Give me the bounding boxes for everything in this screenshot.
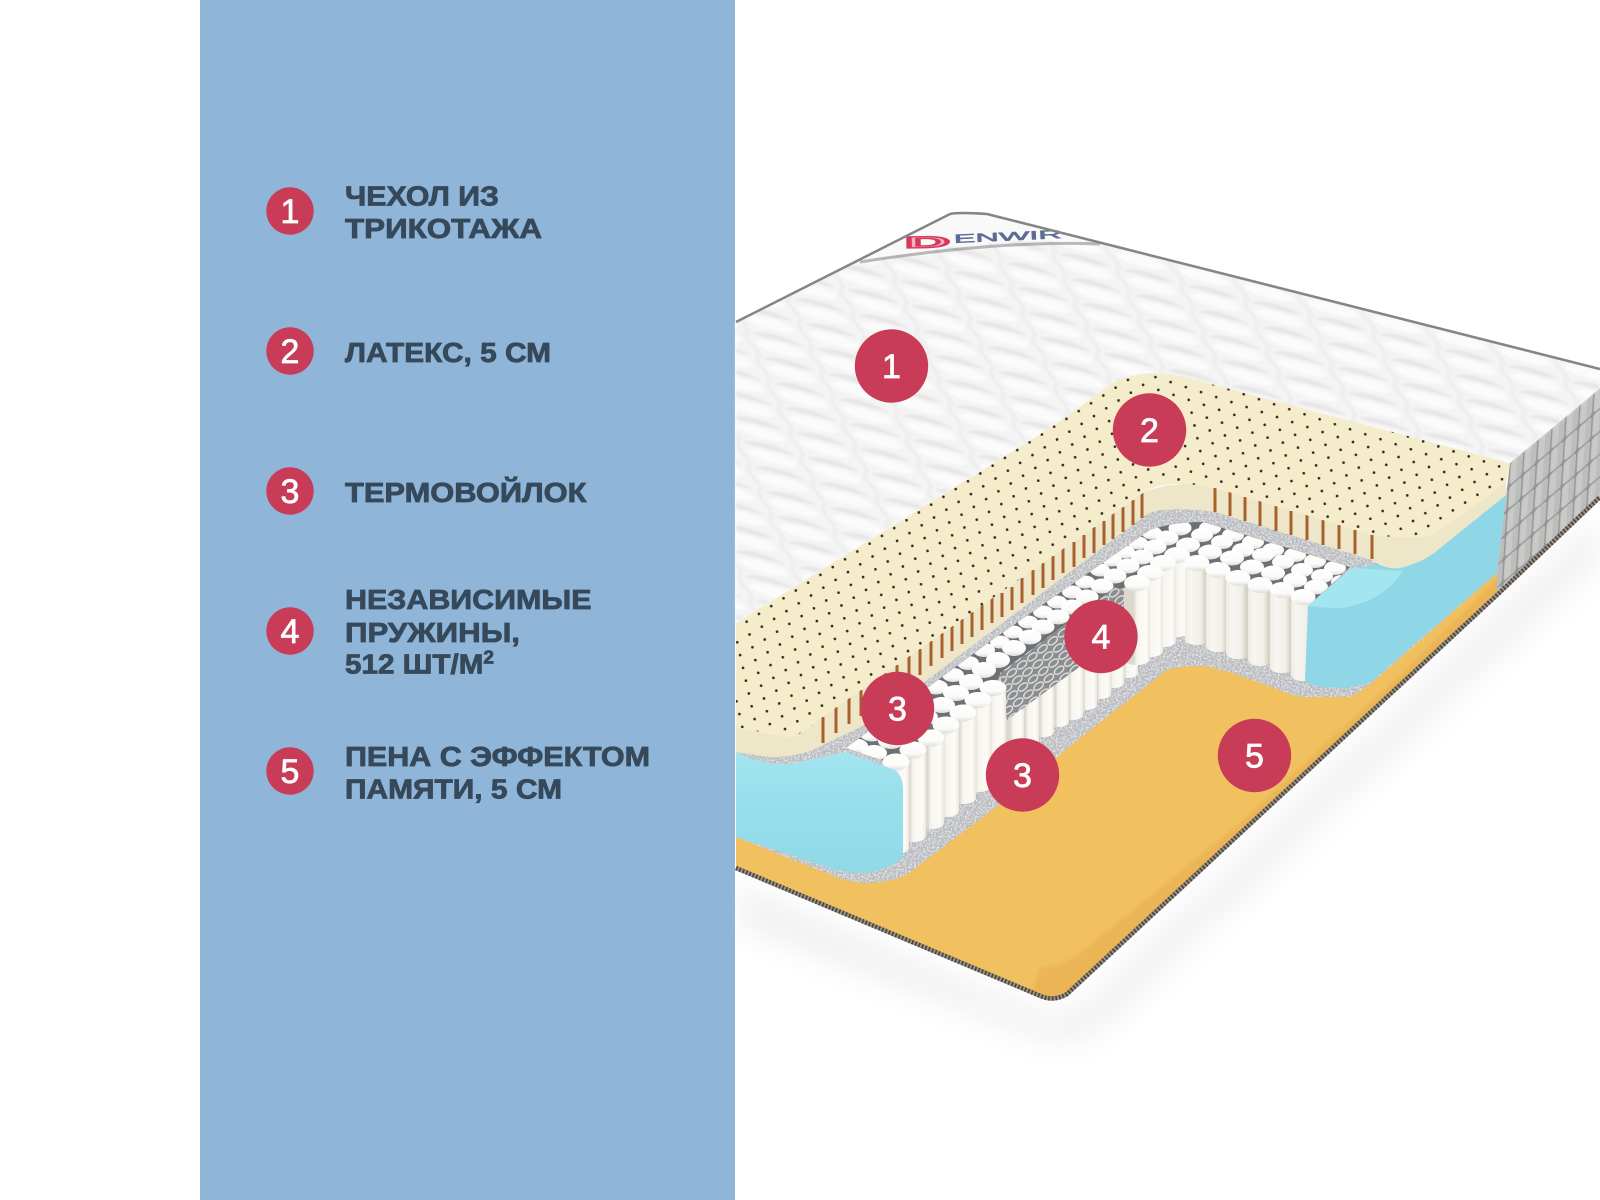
marker 4: 4 [1092, 618, 1110, 656]
layer 4: pocket spring tops [846, 522, 1350, 760]
mattress cutaway illustration [720, 213, 1600, 1041]
layer 3: foam edge, right [1305, 495, 1506, 688]
front spring pockets, left run [882, 680, 1006, 854]
short spring pockets [1002, 600, 1138, 754]
layer 4: pocket springs [882, 547, 1316, 854]
legend item 4: ПРУЖИНЫ, [345, 617, 520, 648]
marker 3 lower: 3 [1013, 757, 1032, 795]
legend item 5: ПАМЯТИ, 5 СМ [345, 774, 562, 804]
marker 2 [1113, 393, 1186, 467]
marker 1: 1 [882, 348, 901, 386]
layer 2: latex top face with perforation [736, 373, 1510, 737]
front spring pockets, right run [1184, 555, 1316, 681]
side wall quilted panel [1497, 388, 1600, 592]
cover edge piping [736, 213, 1600, 369]
legend item 4: НЕЗАВИСИМЫЕ [345, 584, 592, 615]
marker 3 upper: 3 [888, 690, 907, 728]
layer 3: foam edge, left [736, 752, 903, 873]
marker 5 [1218, 719, 1291, 792]
legend list [266, 180, 650, 804]
layer 1: knitted cover [736, 213, 1600, 623]
panel: legend background [200, 0, 735, 1200]
marker 4 [1064, 600, 1138, 673]
cover label with brand logo [860, 213, 1100, 262]
tall spring pockets at corner [1124, 547, 1190, 665]
legend item 2: 2 [281, 333, 299, 371]
legend item 3 [266, 467, 587, 515]
legend item 5: ПЕНА С ЭФФЕКТОМ [345, 741, 650, 772]
exposed steel coils [1000, 587, 1135, 720]
marker 5: 5 [1245, 738, 1264, 776]
legend item 1: ТРИКОТАЖА [345, 213, 542, 244]
marker 1 [855, 329, 928, 403]
legend item 1: 1 [281, 193, 299, 231]
legend item 5: 5 [281, 753, 299, 791]
floor shadow [736, 515, 1600, 1041]
cover label with brand logo: ENWIR [954, 227, 1063, 246]
legend item 3: ТЕРМОВОЙЛОК [345, 476, 587, 508]
legend item 2: ЛАТЕКС, 5 СМ [345, 337, 551, 368]
legend item 4 [266, 584, 592, 680]
layer 3: thermal felt [736, 495, 1506, 883]
legend item 4: 4 [281, 613, 299, 651]
legend item 5 [266, 741, 650, 804]
cover label with brand logo: D [905, 234, 950, 252]
marker 2: 2 [1140, 412, 1159, 450]
legend item 4: 512 ШТ/М [345, 648, 476, 680]
legend item 1 [266, 180, 542, 244]
layer 2: latex side face [736, 483, 1506, 757]
legend item 1: ЧЕХОЛ ИЗ [345, 180, 499, 212]
legend item 2 [266, 327, 551, 375]
legend item 4: 2 [483, 648, 494, 668]
layer 5: memory foam base [720, 497, 1600, 1010]
marker 3 lower [986, 738, 1059, 812]
legend item 3: 3 [281, 473, 299, 511]
marker 3 upper [861, 672, 934, 745]
